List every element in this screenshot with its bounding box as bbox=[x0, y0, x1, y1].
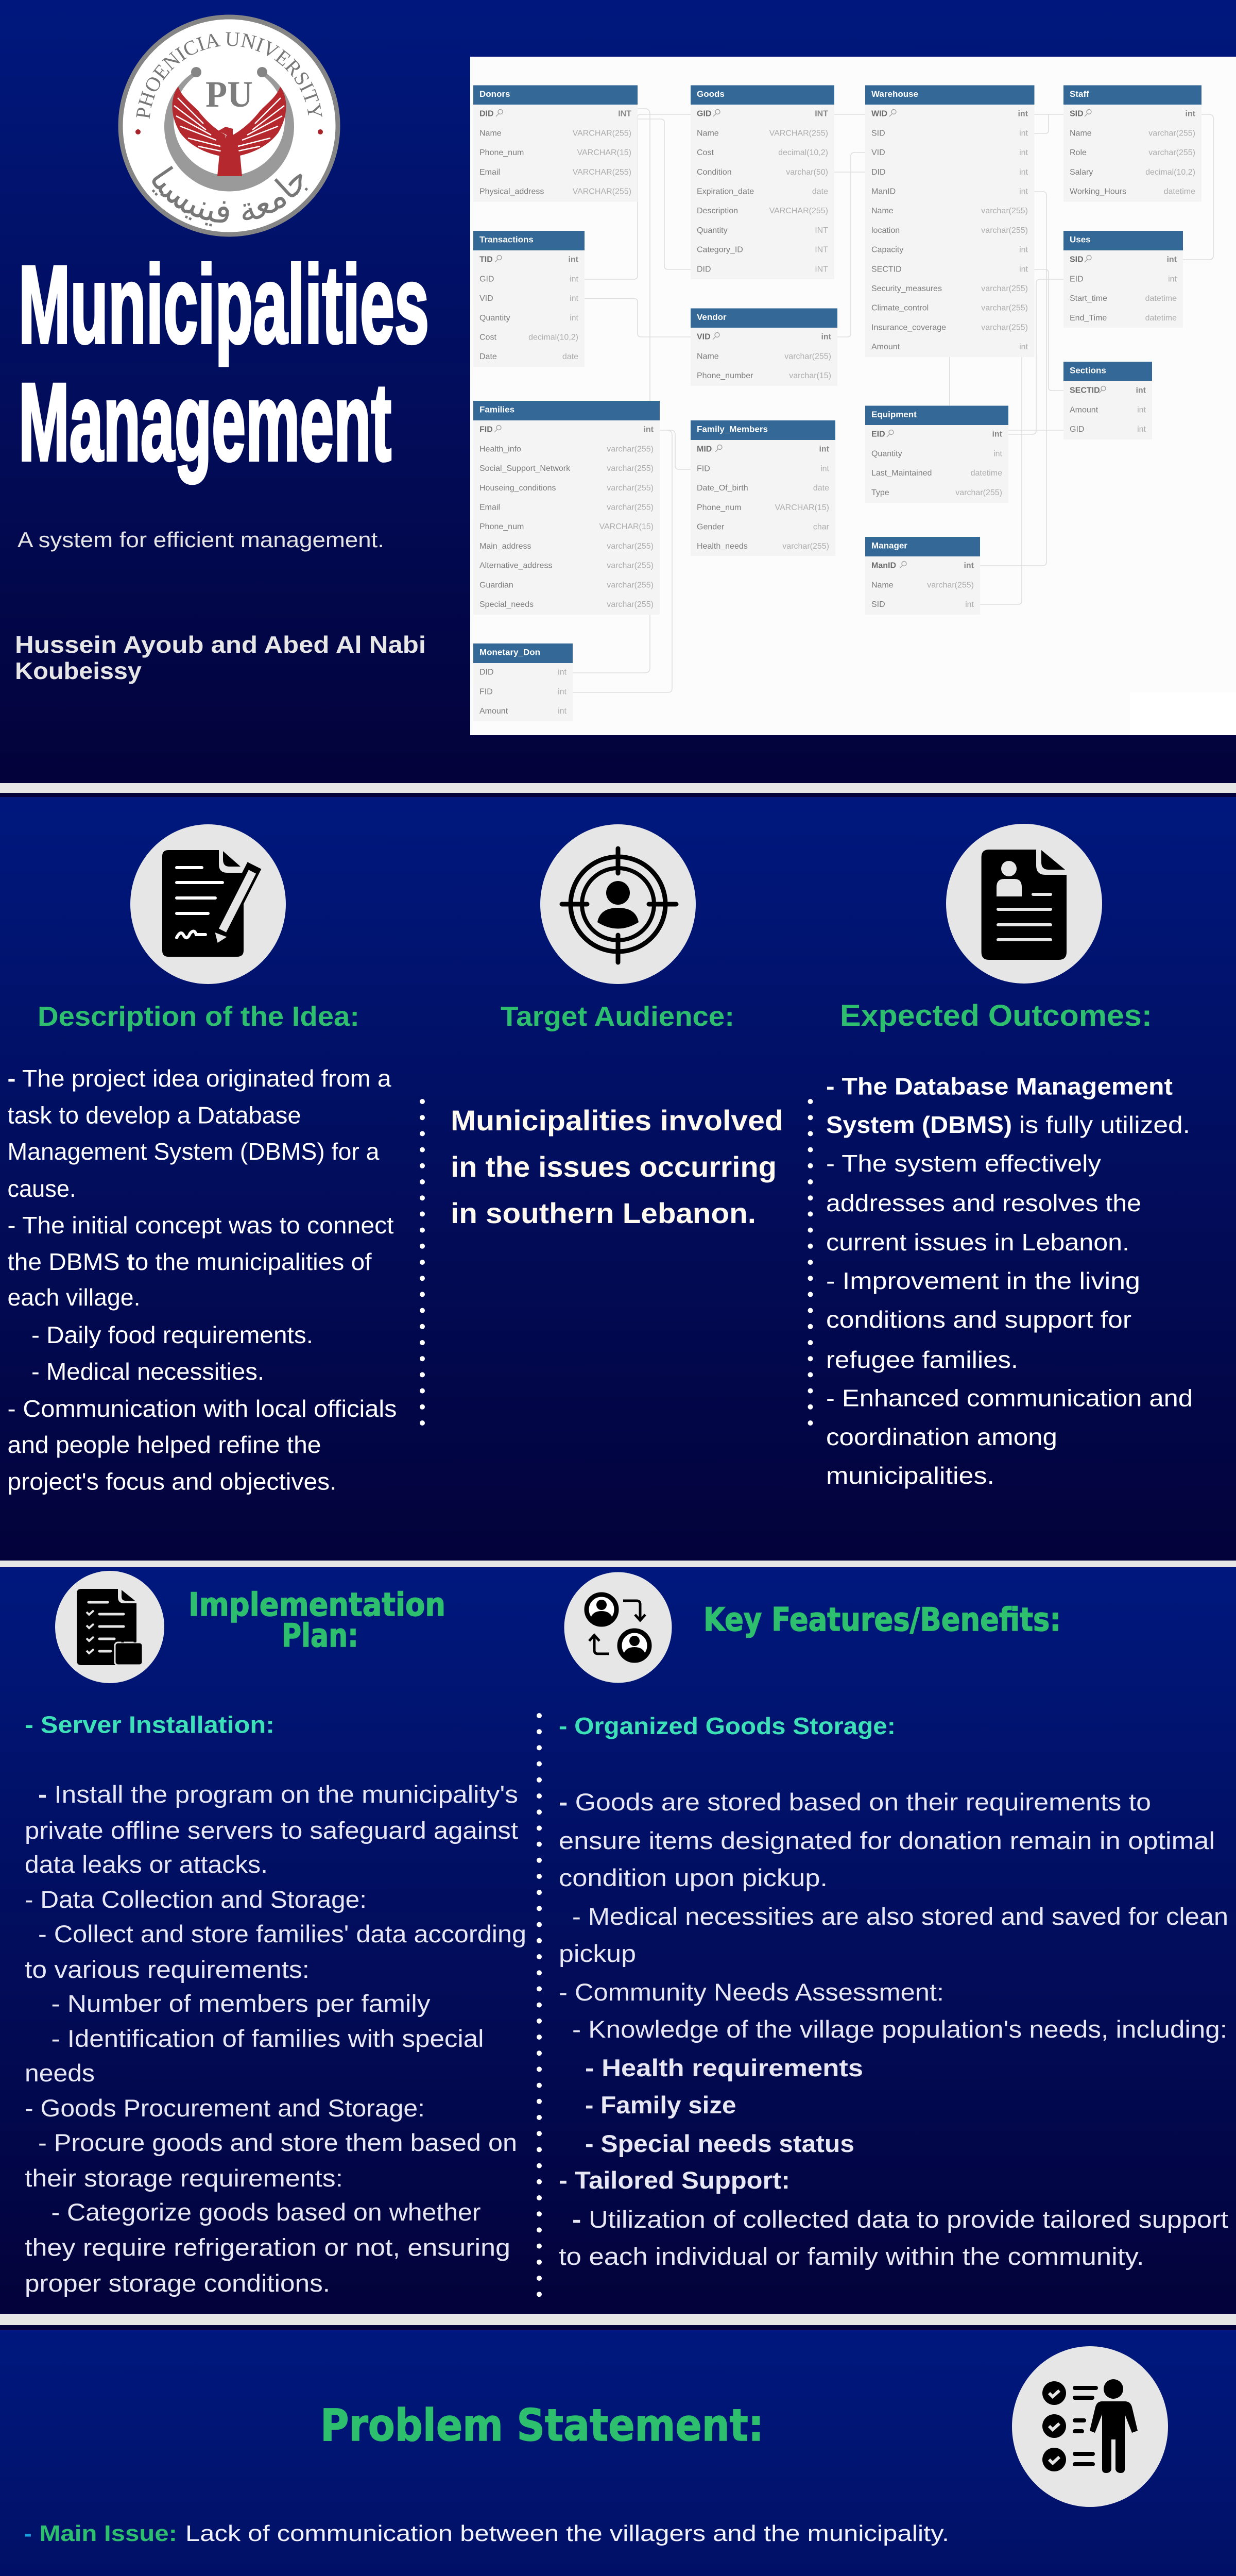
table: Sections: GID bbox=[1070, 425, 1084, 434]
text block: key features bbox=[559, 1713, 1228, 2270]
table: Staff: int bbox=[1185, 110, 1196, 118]
table: Families: Main_address bbox=[479, 542, 531, 551]
text block: key features: - Utilization of collected data to provide tailored support bbox=[572, 2206, 1228, 2233]
table: Sections: int bbox=[1136, 386, 1146, 395]
table: Goods: decimal(10,2) bbox=[778, 148, 828, 157]
text block: implementation plan: - Data Collection and Storage: bbox=[25, 1886, 367, 1913]
table: Manager: ManID bbox=[871, 562, 896, 570]
table: Warehouse: int bbox=[1019, 265, 1028, 274]
section 1 background: header bbox=[0, 0, 1236, 783]
text block: key features: - Goods are stored based on their requirements to bbox=[559, 1788, 1151, 1816]
table: Equipment: Type bbox=[871, 488, 889, 497]
table: Uses: datetime bbox=[1145, 294, 1177, 303]
text block: implementation plan: - Procure goods and store them based on bbox=[38, 2129, 517, 2156]
table: Families: varchar(255) bbox=[607, 600, 654, 609]
table: Vendor: varchar(15) bbox=[789, 371, 831, 380]
text block: implementation plan: - Categorize goods based on whether bbox=[52, 2198, 481, 2226]
table: Equipment: int bbox=[992, 430, 1003, 439]
table: Monetary_Don: int bbox=[558, 687, 567, 696]
text block: key features: - Health requirements bbox=[585, 2054, 863, 2081]
icon: target with person bbox=[540, 824, 696, 984]
table: Sections: Sections bbox=[1070, 366, 1106, 375]
authors: Koubeissy bbox=[15, 657, 142, 684]
table: Manager: int bbox=[965, 600, 974, 609]
text block: expected outcomes: - The system effectively bbox=[826, 1150, 1101, 1177]
table: Uses: Start_time bbox=[1070, 294, 1107, 303]
heading: Key Features/Benefits: Key Features/Benefits: bbox=[703, 1601, 1061, 1638]
text block: expected outcomes: refugee families. bbox=[826, 1346, 1018, 1373]
text block: expected outcomes: municipalities. bbox=[826, 1462, 994, 1489]
table: Manager bbox=[865, 537, 980, 615]
table: Manager: SID bbox=[871, 600, 885, 609]
table: Goods: varchar(50) bbox=[786, 168, 828, 177]
table: Transactions: int bbox=[570, 294, 579, 303]
table: Goods: Condition bbox=[697, 168, 732, 177]
text block: implementation plan: - Server Installation: bbox=[25, 1711, 274, 1738]
table: Manager: varchar(255) bbox=[927, 581, 974, 589]
table: Uses: int bbox=[1168, 275, 1177, 283]
table: Goods: INT bbox=[815, 246, 828, 255]
section 4 background: problem statement bbox=[0, 2330, 1236, 2576]
table: Warehouse: WID bbox=[871, 110, 887, 118]
table: Staff: Name bbox=[1070, 129, 1092, 138]
table: Warehouse: int bbox=[1019, 129, 1028, 138]
table: Families: varchar(255) bbox=[607, 562, 654, 570]
table: Families: Email bbox=[479, 503, 500, 512]
table: Donors: Email bbox=[479, 168, 500, 177]
divider: dotted line 3 bbox=[537, 1716, 542, 2298]
table: Family_Members: Family_Members bbox=[697, 425, 768, 434]
table: Uses: Uses bbox=[1070, 235, 1091, 244]
table: Goods: Description bbox=[697, 207, 738, 215]
table: Families: Phone_num bbox=[479, 522, 524, 531]
table: Warehouse: DID bbox=[871, 168, 886, 177]
text block: key features: - Organized Goods Storage: bbox=[559, 1713, 896, 1739]
text block: key features: - Community Needs Assessment: bbox=[559, 1978, 944, 2006]
table: Families: Guardian bbox=[479, 581, 513, 589]
table: Transactions: int bbox=[570, 314, 579, 323]
table: Transactions: Cost bbox=[479, 333, 496, 342]
table: Warehouse: Capacity bbox=[871, 246, 903, 255]
text block: implementation plan: proper storage conditions. bbox=[25, 2269, 330, 2297]
heading: Problem Statement: Problem Statement: bbox=[320, 2400, 764, 2451]
table: Warehouse: VID bbox=[871, 148, 885, 157]
table: Warehouse: Name bbox=[871, 207, 894, 215]
table: Families bbox=[473, 401, 660, 615]
text block: key features: - Knowledge of the village population's needs, including: bbox=[572, 2015, 1227, 2043]
table: Family_Members: Gender bbox=[697, 522, 725, 532]
heading: Expected Outcomes: Expected Outcomes: bbox=[840, 999, 1152, 1032]
text block: expected outcomes: is fully utilized. bbox=[1019, 1111, 1190, 1138]
table: Monetary_Don: DID bbox=[479, 668, 494, 677]
table: Staff: Working_Hours bbox=[1070, 188, 1126, 196]
table: Donors: Name bbox=[479, 129, 502, 138]
heading: Implementation Plan: Plan: bbox=[282, 1617, 358, 1654]
text block: description of the idea: - The project idea originated from a bbox=[7, 1065, 391, 1092]
text block: description of the idea: cause. bbox=[7, 1175, 76, 1202]
text block: target audience: in the issues occurring bbox=[451, 1150, 777, 1183]
table: Families: varchar(255) bbox=[607, 445, 654, 453]
text block: expected outcomes bbox=[826, 1073, 1193, 1489]
table: Monetary_Don: FID bbox=[479, 687, 493, 696]
table: Goods: Quantity bbox=[697, 226, 728, 235]
table: Goods: GID bbox=[697, 110, 711, 118]
table: Goods: Category_ID bbox=[697, 246, 743, 255]
table: Goods: date bbox=[812, 188, 828, 196]
subtitle: A system for efficient management. bbox=[18, 528, 384, 552]
table: Families: varchar(255) bbox=[607, 581, 654, 589]
table: Families: Alternative_address bbox=[479, 562, 552, 570]
table: Monetary_Don bbox=[473, 643, 573, 721]
table: Donors: Physical_address bbox=[479, 188, 544, 196]
table: Families: Social_Support_Network bbox=[479, 464, 571, 473]
text block: implementation plan: - Collect and store families' data according bbox=[38, 1920, 526, 1947]
table: Sections: SECTID bbox=[1070, 386, 1100, 395]
table: Staff: decimal(10,2) bbox=[1145, 168, 1195, 177]
table: Transactions bbox=[473, 231, 585, 367]
table: Goods: INT bbox=[815, 226, 828, 235]
table: Warehouse: varchar(255) bbox=[981, 207, 1028, 215]
text block: description of the idea: - Communication with local officials bbox=[7, 1395, 397, 1422]
logo: Phoenicia University seal bbox=[118, 14, 340, 237]
table: Uses: int bbox=[1166, 256, 1177, 264]
table: Families: varchar(255) bbox=[607, 542, 654, 551]
table: Staff: SID bbox=[1070, 110, 1084, 118]
table: Warehouse: varchar(255) bbox=[981, 323, 1028, 332]
table: Goods: VARCHAR(255) bbox=[769, 207, 828, 215]
text block: target audience: Municipalities involved bbox=[451, 1104, 783, 1137]
text block: implementation plan: needs bbox=[25, 2059, 95, 2087]
table: Donors bbox=[473, 86, 638, 202]
table: Equipment: varchar(255) bbox=[955, 488, 1002, 497]
table: Goods: VARCHAR(255) bbox=[769, 129, 828, 138]
text block: key features: - Medical necessities are also stored and saved for clean bbox=[572, 1903, 1228, 1930]
section 3 background: plan and features bbox=[0, 1567, 1236, 2314]
heading: Target Audience: Target Audience: bbox=[501, 1001, 734, 1032]
text block: expected outcomes: - Enhanced communication and bbox=[826, 1385, 1193, 1412]
text block: description of the idea: and people helped refine the bbox=[7, 1431, 321, 1458]
table: Families: Families bbox=[479, 405, 514, 414]
text block: expected outcomes: coordination among bbox=[826, 1423, 1057, 1450]
text block: description of the idea: - Daily food requirements. bbox=[31, 1321, 313, 1348]
table: Donors: DID bbox=[479, 110, 494, 118]
table: Warehouse: Amount bbox=[871, 343, 900, 351]
table: Staff bbox=[1063, 86, 1201, 202]
table: Staff: Staff bbox=[1070, 89, 1089, 99]
table: Monetary_Don: Monetary_Don bbox=[479, 647, 540, 657]
table: Monetary_Don: Amount bbox=[479, 707, 508, 716]
table: Sections: int bbox=[1137, 425, 1146, 434]
table: Warehouse: int bbox=[1019, 188, 1028, 196]
table: Warehouse: SID bbox=[871, 129, 885, 138]
table: Uses: EID bbox=[1070, 275, 1084, 283]
table: Warehouse: int bbox=[1019, 246, 1028, 255]
table: Warehouse: int bbox=[1019, 343, 1028, 351]
table: Warehouse: Insurance_coverage bbox=[871, 323, 946, 332]
text block: target audience: in southern Lebanon. bbox=[451, 1197, 756, 1229]
table: Manager: int bbox=[964, 562, 974, 570]
table: Warehouse: varchar(255) bbox=[981, 226, 1028, 235]
authors: Hussein Ayoub and Abed Al Nabi bbox=[15, 631, 426, 658]
table: Families: Health_info bbox=[479, 445, 521, 453]
table: Uses: datetime bbox=[1145, 314, 1177, 323]
table: Monetary_Don: int bbox=[558, 707, 567, 716]
text block: expected outcomes: addresses and resolves the bbox=[826, 1190, 1141, 1216]
text block: expected outcomes: - Improvement in the living bbox=[826, 1267, 1140, 1294]
table: Staff: Salary bbox=[1070, 168, 1093, 177]
table: Family_Members: date bbox=[813, 484, 829, 493]
table: Sections: Amount bbox=[1070, 405, 1098, 414]
text block: implementation plan: to various requirements: bbox=[25, 1956, 310, 1983]
table: Family_Members bbox=[691, 420, 835, 556]
table: Transactions: Date bbox=[479, 352, 497, 361]
text block: key features: pickup bbox=[559, 1940, 636, 1967]
divider: dotted line 2 bbox=[808, 1101, 813, 1427]
table: Family_Members: VARCHAR(15) bbox=[775, 503, 829, 512]
table: Families: int bbox=[643, 426, 654, 434]
table: Transactions: date bbox=[562, 352, 578, 361]
table: Family_Members: Phone_num bbox=[697, 503, 741, 512]
text block: implementation plan: they require refrigeration or not, ensuring bbox=[25, 2234, 510, 2261]
text block: description of the idea: - The initial concept was to connect bbox=[7, 1212, 394, 1239]
table: Donors: VARCHAR(15) bbox=[577, 148, 631, 157]
text block: main and additional issue: - bbox=[24, 2521, 32, 2546]
table: Warehouse: Climate_control bbox=[871, 304, 929, 313]
table: Transactions: VID bbox=[479, 294, 493, 303]
table: Transactions: TID bbox=[479, 256, 493, 264]
table: Goods: Expiration_date bbox=[697, 188, 754, 196]
icon: two people exchange bbox=[564, 1572, 672, 1683]
table: Goods: Cost bbox=[697, 148, 714, 157]
text block: implementation plan: their storage requirements: bbox=[25, 2164, 343, 2192]
text block: implementation plan bbox=[25, 1711, 526, 2297]
table: Equipment bbox=[865, 406, 1008, 503]
title: Municipalities bbox=[19, 243, 429, 366]
table: Vendor: Vendor bbox=[697, 312, 727, 322]
table: Equipment: datetime bbox=[971, 469, 1002, 478]
table: Uses: End_Time bbox=[1070, 314, 1107, 323]
table: Warehouse: SECTID bbox=[871, 265, 902, 274]
text block: key features: to each individual or family within the community. bbox=[559, 2243, 1144, 2270]
heading: Implementation Plan: Implementation bbox=[188, 1586, 445, 1623]
icon: document with pen bbox=[130, 824, 286, 984]
text block: expected outcomes: current issues in Lebanon. bbox=[826, 1229, 1129, 1256]
table: Equipment: Last_Maintained bbox=[871, 469, 932, 478]
table: Family_Members: varchar(255) bbox=[782, 542, 829, 551]
text block: key features: ensure items designated for donation remain in optimal bbox=[559, 1827, 1215, 1854]
table: Manager: Manager bbox=[871, 541, 907, 550]
table: Manager: Name bbox=[871, 581, 894, 589]
table: Donors: Donors bbox=[479, 89, 510, 99]
table: Family_Members: int bbox=[820, 464, 830, 473]
table: Warehouse: location bbox=[871, 226, 900, 235]
icon: person with checklist bbox=[1012, 2346, 1168, 2507]
table: Staff: Role bbox=[1070, 148, 1087, 157]
table: Family_Members: int bbox=[819, 445, 830, 454]
table: Transactions: Transactions bbox=[479, 235, 534, 244]
icon: profile document bbox=[946, 824, 1102, 984]
table: Donors: VARCHAR(255) bbox=[573, 168, 631, 177]
table: Family_Members: Health_needs bbox=[697, 542, 748, 551]
table: Families: FID bbox=[479, 426, 493, 434]
table: Equipment: Equipment bbox=[871, 410, 917, 419]
table: Equipment: int bbox=[993, 449, 1003, 458]
text block: implementation plan: data leaks or attacks. bbox=[25, 1851, 268, 1878]
table: Transactions: GID bbox=[479, 275, 494, 283]
table: Sections bbox=[1063, 362, 1152, 439]
table: Goods: Name bbox=[697, 129, 719, 138]
table: Staff: varchar(255) bbox=[1148, 148, 1195, 157]
text block: description of the idea: - Medical necessities. bbox=[31, 1358, 264, 1385]
table: Family_Members: MID bbox=[697, 445, 712, 454]
text block: implementation plan: - Install the program on the municipality's bbox=[38, 1781, 518, 1808]
text block: target audience bbox=[451, 1104, 783, 1229]
text block: key features: condition upon pickup. bbox=[559, 1864, 828, 1891]
logo: Phoenicia University seal: PHOENICIA UNIVERSITY bbox=[136, 32, 322, 119]
table: Uses: SID bbox=[1070, 256, 1084, 264]
table: Families: Houseing_conditions bbox=[479, 484, 556, 493]
text block: main and additional issue: Lack of communication between the villagers and the municipality. bbox=[185, 2521, 949, 2546]
table: Families: varchar(255) bbox=[607, 464, 654, 473]
table: Warehouse bbox=[865, 86, 1034, 357]
text block: expected outcomes: System (DBMS) bbox=[826, 1111, 1012, 1138]
logo: Phoenicia University seal: PU bbox=[205, 74, 253, 115]
table: Warehouse: ManID bbox=[871, 188, 896, 196]
table: Equipment: EID bbox=[871, 430, 885, 439]
text block: description of the idea: the DBMS to the municipalities of bbox=[7, 1248, 372, 1275]
table: Transactions: decimal(10,2) bbox=[528, 333, 578, 342]
divider: dotted line 1 bbox=[420, 1101, 425, 1427]
text block: implementation plan: private offline servers to safeguard against bbox=[25, 1817, 518, 1844]
table: Warehouse: Security_measures bbox=[871, 284, 942, 293]
table: Vendor bbox=[691, 308, 837, 386]
table: Vendor: int bbox=[821, 333, 832, 342]
text block: expected outcomes: - The Database Management bbox=[826, 1073, 1173, 1099]
heading: Implementation Plan bbox=[188, 1586, 445, 1654]
table: Families: varchar(255) bbox=[607, 503, 654, 512]
table: Goods: DID bbox=[697, 265, 711, 274]
table: Uses bbox=[1063, 231, 1183, 328]
table: Equipment: Quantity bbox=[871, 449, 902, 458]
text block: key features: - Special needs status bbox=[585, 2130, 854, 2157]
table: Transactions: int bbox=[570, 275, 579, 283]
table: Families: varchar(255) bbox=[607, 484, 654, 493]
title: Management bbox=[19, 361, 391, 484]
text block: description of the idea: task to develop a Database bbox=[7, 1101, 301, 1128]
table: Family_Members: FID bbox=[697, 464, 710, 473]
logo: Phoenicia University seal: جامعة فينيسيا bbox=[151, 166, 308, 227]
table: Vendor: VID bbox=[697, 333, 711, 342]
table: Goods bbox=[691, 86, 834, 279]
heading: Description of the Idea: Description of the Idea: bbox=[38, 1001, 359, 1032]
table: Warehouse: varchar(255) bbox=[981, 304, 1028, 313]
table: Warehouse: int bbox=[1019, 168, 1028, 177]
table: Families: VARCHAR(15) bbox=[599, 522, 654, 531]
table: Goods: INT bbox=[815, 265, 828, 274]
table: Vendor: Name bbox=[697, 352, 719, 361]
table: Warehouse: int bbox=[1018, 110, 1028, 118]
text block: expected outcomes: conditions and support for bbox=[826, 1306, 1131, 1333]
text block: implementation plan: - Number of members per family bbox=[52, 1990, 431, 2017]
relationship connectors bbox=[573, 109, 1213, 692]
authors bbox=[15, 631, 426, 684]
table: Families: Special_needs bbox=[479, 600, 534, 609]
table: Family_Members: Date_Of_birth bbox=[697, 484, 748, 493]
text block: key features: - Tailored Support: bbox=[559, 2166, 790, 2194]
text block: main and additional issue bbox=[24, 2521, 989, 2576]
table: Warehouse: int bbox=[1019, 148, 1028, 157]
table: Vendor: varchar(255) bbox=[784, 352, 831, 361]
table: Monetary_Don: int bbox=[558, 668, 567, 677]
table: Vendor: Phone_number bbox=[697, 371, 753, 380]
table: Sections: int bbox=[1137, 405, 1146, 414]
text block: description of the idea: project's focus and objectives. bbox=[7, 1468, 337, 1495]
text block: description of the idea: each village. bbox=[7, 1284, 140, 1311]
text block: implementation plan: - Identification of families with special bbox=[52, 2025, 484, 2052]
table: Warehouse: Warehouse bbox=[871, 89, 918, 99]
table: Staff: datetime bbox=[1164, 188, 1195, 196]
text block: description of the idea: Management System (DBMS) for a bbox=[7, 1138, 380, 1165]
text block: key features: - Family size bbox=[585, 2091, 736, 2119]
icon: checklist with briefcase bbox=[55, 1571, 164, 1683]
table: Goods: Goods bbox=[697, 89, 725, 99]
table: Donors: VARCHAR(255) bbox=[573, 188, 631, 196]
table: Donors: VARCHAR(255) bbox=[573, 129, 631, 138]
text block: implementation plan: - Goods Procurement and Storage: bbox=[25, 2094, 425, 2122]
table: Donors: INT bbox=[618, 110, 631, 118]
table: Staff: varchar(255) bbox=[1148, 129, 1195, 138]
table: Warehouse: varchar(255) bbox=[981, 284, 1028, 293]
section 2 background: idea, audience, outcomes bbox=[0, 797, 1236, 1561]
title bbox=[19, 243, 429, 484]
table: Transactions: int bbox=[568, 256, 579, 264]
table: Goods: INT bbox=[815, 110, 828, 118]
table: Transactions: Quantity bbox=[479, 314, 510, 323]
text block: description of the idea bbox=[7, 1065, 397, 1495]
table: Family_Members: char bbox=[813, 522, 830, 532]
text block: main and additional issue: Main Issue: bbox=[39, 2521, 177, 2546]
table: Donors: Phone_num bbox=[479, 148, 524, 157]
panel: database ER diagram bbox=[470, 57, 1236, 735]
